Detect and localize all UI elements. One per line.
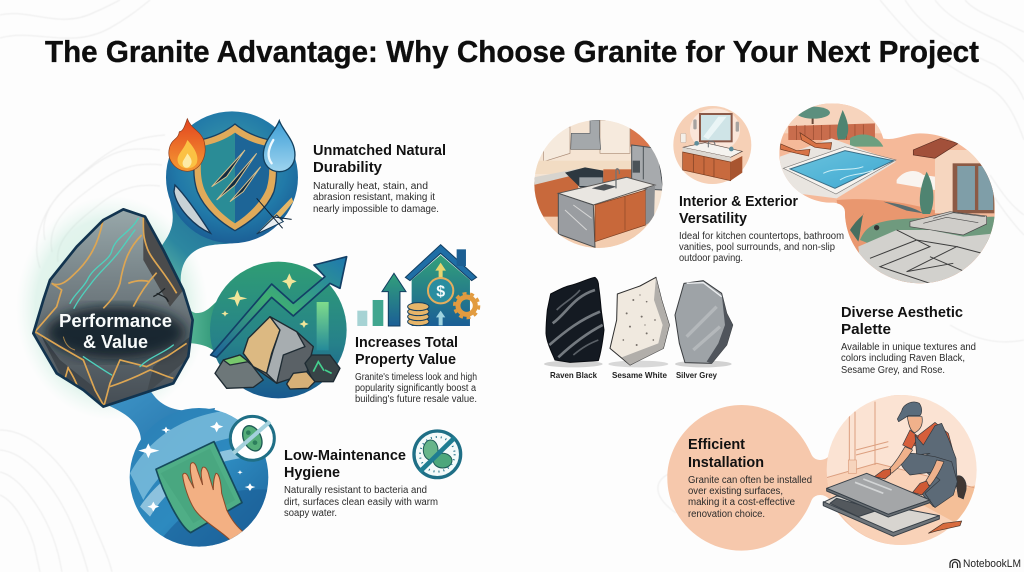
text: interior and exterior versatility: vanities, pool surrounds, and non-slip: [679, 242, 835, 253]
panel: performance and value hub with branches: [16, 111, 479, 553]
house: [935, 150, 997, 213]
icon: trowel: [928, 521, 962, 533]
icon: rising value house and bars: [357, 245, 479, 326]
stone label: Sesame White: [612, 370, 667, 380]
icon: property value circle: [210, 257, 347, 398]
text: interior and exterior versatility: Versatility: [679, 211, 747, 227]
icon: flame: [169, 119, 205, 171]
illustration: worker laying slab: [822, 395, 977, 545]
connector to durability: [160, 200, 262, 295]
hub label: [59, 311, 172, 352]
granite slabs: [823, 473, 939, 536]
text: increases total property value: building's future resale value.: [355, 394, 477, 405]
panel: granite stone samples: [544, 277, 733, 380]
text: increases total property value: Property Value: [355, 352, 456, 368]
ground: [837, 199, 995, 290]
stone label: Silver Grey: [676, 370, 717, 380]
text: efficient installation: Granite can often be installed: [688, 475, 812, 486]
text: low-maintenance hygiene: Low-Maintenance: [284, 448, 406, 464]
text: low-maintenance hygiene: dirt, surfaces clean easily with warm: [284, 497, 438, 508]
text: interior and exterior versatility: Interior & Exterior: [679, 194, 798, 210]
illustration: bathroom vanity: [673, 106, 751, 184]
text: efficient installation: Installation: [688, 455, 764, 471]
text: unmatched natural durability: abrasion resistant, making it: [313, 192, 435, 203]
text: efficient installation: [688, 437, 812, 520]
paving: [858, 230, 990, 284]
granite rocks: [215, 317, 340, 389]
text: low-maintenance hygiene: Hygiene: [284, 465, 340, 481]
text: increases total property value: popularity significantly boost a: [355, 383, 476, 394]
illustration: pool and patio: [777, 100, 1000, 290]
notebooklm logo: NotebookLM: [963, 558, 1021, 570]
title: The Granite Advantage: Why Choose Granite for Your Next Project: [45, 34, 979, 69]
icon: chisel: [174, 185, 211, 233]
text: increases total property value: Granite's timeless look and high: [355, 372, 477, 383]
text: efficient installation: making it a cost-effective: [688, 497, 795, 508]
text: efficient installation: over existing surfaces,: [688, 486, 783, 497]
text: increases total property value: [355, 335, 477, 405]
hand: [182, 462, 243, 540]
text: diverse aesthetic palette: Available in unique textures and: [841, 342, 976, 353]
stone: raven black: [546, 277, 604, 362]
connector to hygiene: [100, 390, 215, 477]
text: diverse aesthetic palette: Diverse Aesthetic: [841, 305, 963, 321]
central rock: [33, 209, 193, 407]
icon: shield durability circle: [166, 111, 298, 243]
text: diverse aesthetic palette: Palette: [841, 322, 891, 338]
glow around central rock: [16, 196, 208, 420]
text: unmatched natural durability: nearly impossible to damage.: [313, 204, 439, 215]
illustration: kitchen: [534, 120, 662, 248]
icon: hygiene wipe circle: [130, 408, 277, 553]
peach blob background: [667, 395, 975, 551]
text: diverse aesthetic palette: Sesame Grey, and Rose.: [841, 365, 945, 376]
text: interior and exterior versatility: Ideal for kitchen countertops, bathroom: [679, 231, 844, 242]
text: interior and exterior versatility: outdoor paving.: [679, 253, 743, 264]
text: low-maintenance hygiene: Naturally resistant to bacteria and: [284, 485, 427, 496]
connector to property value: [183, 295, 220, 356]
text: unmatched natural durability: Unmatched Natural: [313, 143, 446, 159]
panel: versatility illustrations: [530, 100, 1000, 290]
text: unmatched natural durability: Naturally heat, stain, and: [313, 181, 428, 192]
stone label: Raven Black: [550, 370, 597, 380]
text: efficient installation: Efficient: [688, 437, 745, 453]
icon: knife tip: [257, 197, 293, 234]
text: low-maintenance hygiene: soapy water.: [284, 508, 337, 519]
green cloth: [156, 442, 242, 533]
text: increases total property value: Increases Total: [355, 335, 458, 351]
steps: [910, 212, 987, 235]
text: unmatched natural durability: [313, 143, 446, 215]
icon: rising value house and bars: $: [436, 284, 445, 301]
text: diverse aesthetic palette: colors including Raven Black,: [841, 353, 965, 364]
text: low-maintenance hygiene: [284, 448, 438, 519]
panel: efficient installation: [667, 392, 980, 552]
text: efficient installation: renovation choice.: [688, 509, 765, 520]
text: unmatched natural durability: Durability: [313, 160, 382, 176]
hub label: & Value: [83, 332, 148, 352]
stone: sesame white: [610, 277, 669, 365]
stone: silver grey: [675, 281, 733, 363]
text: interior and exterior versatility: [679, 194, 844, 264]
hub label: Performance: [59, 311, 172, 331]
icon: water drop: [263, 121, 295, 172]
arrow: [211, 257, 347, 357]
icon: no germs badge: [414, 431, 461, 478]
bacteria badge: [230, 416, 274, 460]
text: diverse aesthetic palette: [841, 305, 976, 376]
